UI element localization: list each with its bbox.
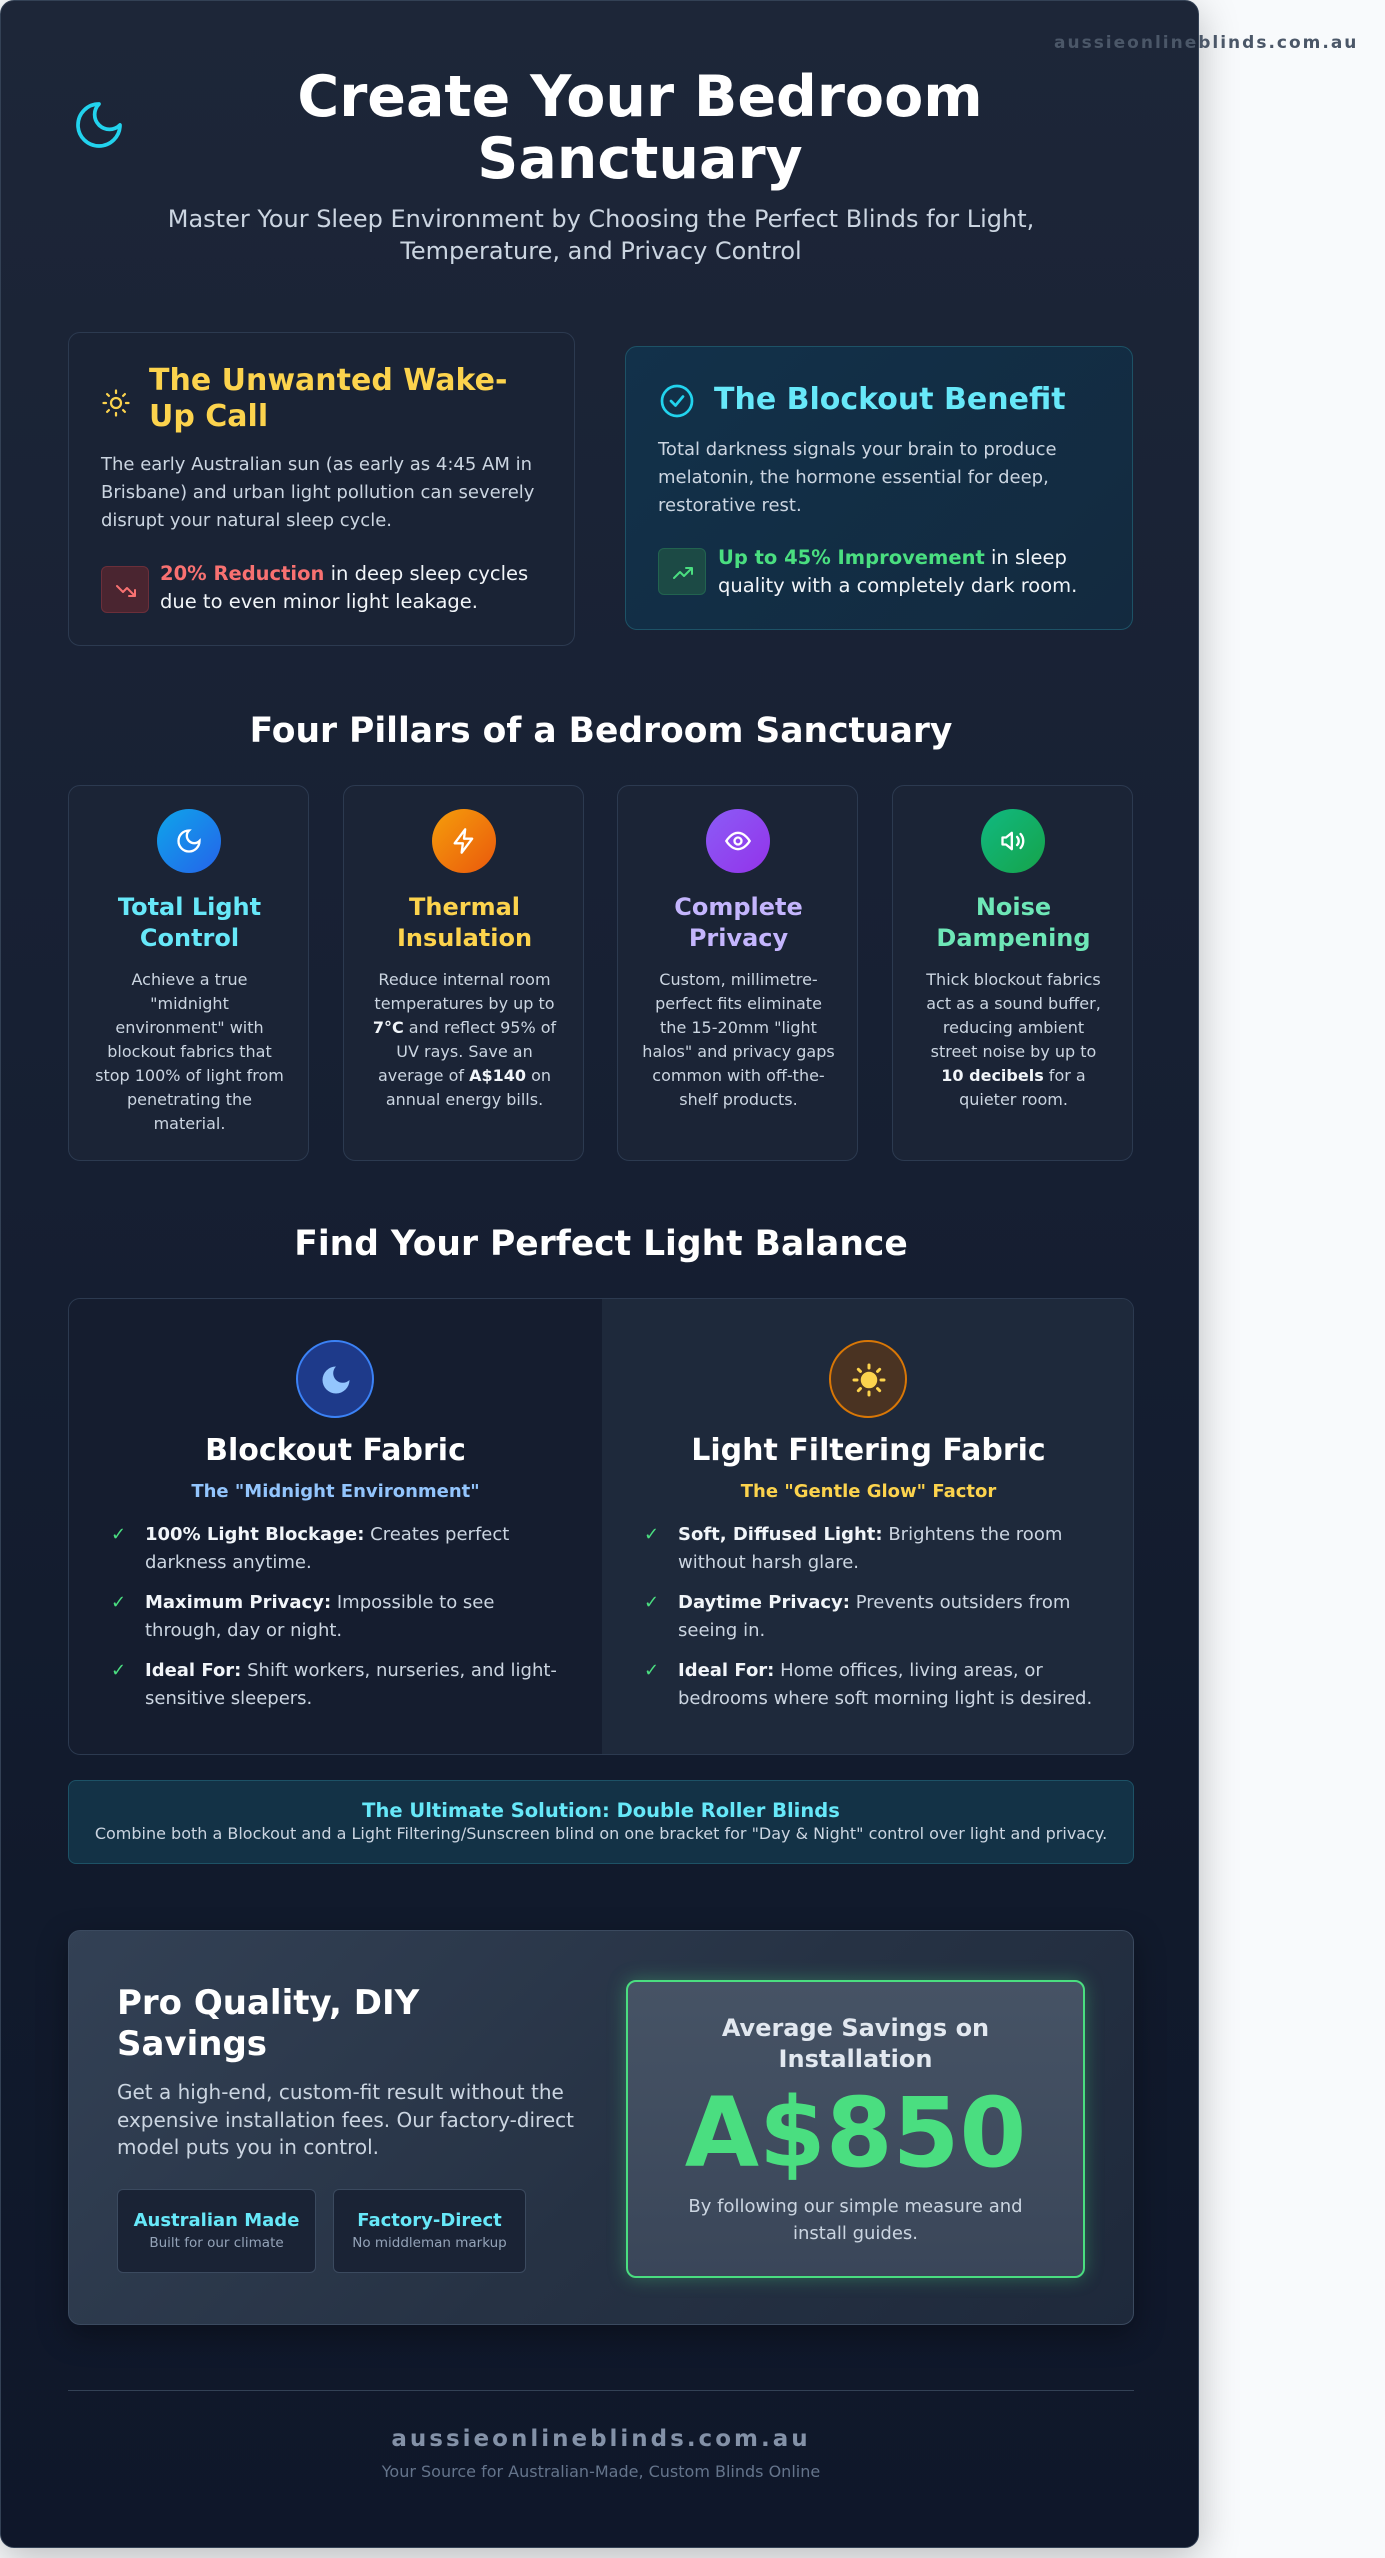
divider	[68, 2390, 1134, 2391]
stat	[160, 562, 528, 613]
badge: factory direct: No middleman markup	[352, 2235, 507, 2251]
title: Create Your Bedroom	[297, 64, 983, 130]
body text: restorative rest.	[658, 495, 802, 516]
panel: unwanted wake-up call	[68, 332, 575, 646]
savings callout: Average Savings on	[722, 2014, 989, 2042]
title	[297, 64, 983, 192]
list: bedrooms where soft morning light is desired.	[678, 1688, 1092, 1708]
stat: 20% Reduction in deep sleep cycles	[160, 562, 528, 585]
pillar: thermal	[343, 785, 584, 1161]
title	[674, 893, 803, 952]
title: Insulation	[397, 924, 532, 952]
banner text: Combine both a Blockout and a Light Filtering/Sunscreen blind on one bracket for "Day & Night" control over light and privacy.	[95, 1824, 1107, 1843]
pillar: light control	[68, 785, 309, 1161]
list: sensitive sleepers.	[145, 1688, 312, 1708]
icon	[432, 809, 496, 873]
description	[95, 970, 284, 1133]
heading: The Blockout Benefit	[714, 382, 1066, 417]
title: Sanctuary	[477, 126, 803, 192]
body text: melatonin, the hormone essential for deep,	[658, 467, 1049, 488]
icon	[981, 809, 1045, 873]
title: Light Filtering Fabric	[691, 1433, 1046, 1468]
panel: pro quality	[68, 1930, 1134, 2325]
description: Thick blockout fabrics	[926, 970, 1101, 989]
list: Ideal For: Shift workers, nurseries, and light-	[145, 1660, 557, 1681]
list: Maximum Privacy: Impossible to see	[145, 1592, 494, 1613]
description: 7°C and reflect 95% of	[373, 1018, 556, 1037]
banner: double roller blinds	[68, 1780, 1134, 1864]
comparison panel	[68, 1298, 1134, 1755]
list: ✓	[111, 1524, 126, 1545]
savings callout: install guides.	[793, 2223, 918, 2244]
description: reducing ambient	[943, 1018, 1084, 1037]
subtitle: The "Gentle Glow" Factor	[741, 1481, 996, 1502]
list: Daytime Privacy: Prevents outsiders from	[678, 1592, 1070, 1613]
column: light filtering	[602, 1299, 1135, 1756]
body text: The early Australian sun (as early as 4:45 AM in	[101, 454, 532, 475]
title: Complete	[674, 893, 803, 921]
heading: Savings	[117, 2024, 267, 2064]
list: ✓	[644, 1660, 659, 1681]
stat: Up to 45% Improvement in sleep	[718, 546, 1067, 569]
badge: australian made	[117, 2189, 316, 2273]
pillar: privacy	[617, 785, 858, 1161]
description: act as a sound buffer,	[926, 994, 1101, 1013]
title: Total Light	[118, 893, 261, 921]
list: Ideal For: Home offices, living areas, or	[678, 1660, 1043, 1681]
description: shelf products.	[679, 1090, 798, 1109]
description	[373, 970, 556, 1109]
heading: light balance: Find Your Perfect Light Balance	[294, 1224, 908, 1264]
description: stop 100% of light from	[95, 1066, 284, 1085]
body text: Total darkness signals your brain to produce	[658, 439, 1057, 460]
subtitle: Master Your Sleep Environment by Choosing the Perfect Blinds for Light,	[168, 205, 1034, 233]
body text: disrupt your natural sleep cycle.	[101, 510, 392, 531]
description: the 15-20mm "light	[660, 1018, 817, 1037]
subtitle: The "Midnight Environment"	[191, 1481, 480, 1502]
heading	[117, 1983, 420, 2064]
icon	[706, 809, 770, 873]
savings callout: Installation	[779, 2045, 932, 2073]
icon: moon circle	[296, 1340, 374, 1418]
description	[926, 970, 1101, 1109]
watermark: aussieonlineblinds.com.au	[1054, 33, 1358, 53]
banner title: The Ultimate Solution: Double Roller Blinds	[362, 1799, 840, 1822]
list	[644, 1524, 1092, 1708]
badge: australian made: Built for our climate	[149, 2235, 284, 2251]
body text: Brisbane) and urban light pollution can severely	[101, 482, 534, 503]
description: common with off-the-	[652, 1066, 825, 1085]
title: Blockout Fabric	[205, 1433, 466, 1468]
icon: trend up	[658, 548, 706, 595]
description: Custom, millimetre-	[659, 970, 818, 989]
paragraph	[117, 2080, 574, 2159]
heading: four pillars: Four Pillars of a Bedroom Sanctuary	[250, 711, 952, 751]
description: blockout fabrics that	[107, 1042, 272, 1061]
list: ✓	[111, 1660, 126, 1681]
paragraph: expensive installation fees. Our factory-direct	[117, 2108, 574, 2132]
list: through, day or night.	[145, 1620, 342, 1640]
title	[118, 893, 261, 952]
title: Control	[140, 924, 239, 952]
description: quieter room.	[959, 1090, 1068, 1109]
title: Thermal	[409, 893, 520, 921]
list: ✓	[111, 1592, 126, 1613]
icon: check circle	[660, 384, 694, 418]
description: street noise by up to	[931, 1042, 1096, 1061]
icon: trend down	[101, 566, 149, 613]
heading	[149, 363, 507, 434]
title: Privacy	[689, 924, 788, 952]
description: environment" with	[115, 1018, 264, 1037]
description: penetrating the	[127, 1090, 252, 1109]
body text	[100, 454, 534, 531]
stat	[718, 546, 1077, 597]
description: material.	[154, 1114, 225, 1133]
title	[936, 893, 1091, 952]
description: average of A$140 on	[378, 1066, 551, 1085]
panel: blockout benefit	[625, 346, 1133, 630]
savings callout: By following our simple measure and	[688, 2196, 1023, 2217]
body text	[658, 439, 1057, 516]
icon	[157, 809, 221, 873]
description: Achieve a true	[131, 970, 248, 989]
description: annual energy bills.	[386, 1090, 543, 1109]
list: without harsh glare.	[678, 1552, 859, 1572]
list: ✓	[644, 1524, 659, 1545]
description: halos" and privacy gaps	[642, 1042, 835, 1061]
column: blockout	[69, 1299, 602, 1756]
icon: sun	[102, 389, 130, 417]
list: Soft, Diffused Light: Brightens the room	[678, 1524, 1062, 1545]
list: darkness anytime.	[145, 1552, 312, 1572]
savings callout: A$850	[685, 2077, 1026, 2189]
pillar: noise	[892, 785, 1133, 1161]
list: seeing in.	[678, 1620, 765, 1640]
badge: australian made: Australian Made	[134, 2210, 299, 2231]
subtitle: Temperature, and Privacy Control	[400, 237, 802, 265]
icon: moon	[76, 102, 122, 148]
stat: quality with a completely dark room.	[718, 574, 1077, 597]
subtitle	[168, 205, 1034, 265]
badge: factory direct: Factory-Direct	[357, 2210, 502, 2231]
list: 100% Light Blockage: Creates perfect	[145, 1524, 509, 1545]
title	[397, 893, 532, 952]
description: UV rays. Save an	[396, 1042, 533, 1061]
icon: sun circle	[829, 1340, 907, 1418]
heading: Pro Quality, DIY	[117, 1983, 419, 2023]
list: ✓	[644, 1592, 659, 1613]
description: perfect fits eliminate	[655, 994, 822, 1013]
heading: Up Call	[149, 399, 268, 434]
paragraph: Get a high-end, custom-fit result without the	[117, 2080, 564, 2104]
title: Noise	[976, 893, 1051, 921]
description: temperatures by up to	[374, 994, 555, 1013]
description: 10 decibels for a	[941, 1066, 1086, 1085]
badge: factory direct	[333, 2189, 526, 2273]
title: Dampening	[936, 924, 1091, 952]
stat: due to even minor light leakage.	[160, 590, 478, 613]
list	[111, 1524, 557, 1708]
footer brand: aussieonlineblinds.com.au	[391, 2426, 811, 2452]
description	[642, 970, 835, 1109]
savings callout	[626, 1980, 1085, 2278]
footer tagline: Your Source for Australian-Made, Custom Blinds Online	[382, 2462, 820, 2481]
heading: The Unwanted Wake-	[149, 363, 507, 398]
description: "midnight	[150, 994, 229, 1013]
paragraph: model puts you in control.	[117, 2135, 379, 2159]
description: Reduce internal room	[378, 970, 551, 989]
